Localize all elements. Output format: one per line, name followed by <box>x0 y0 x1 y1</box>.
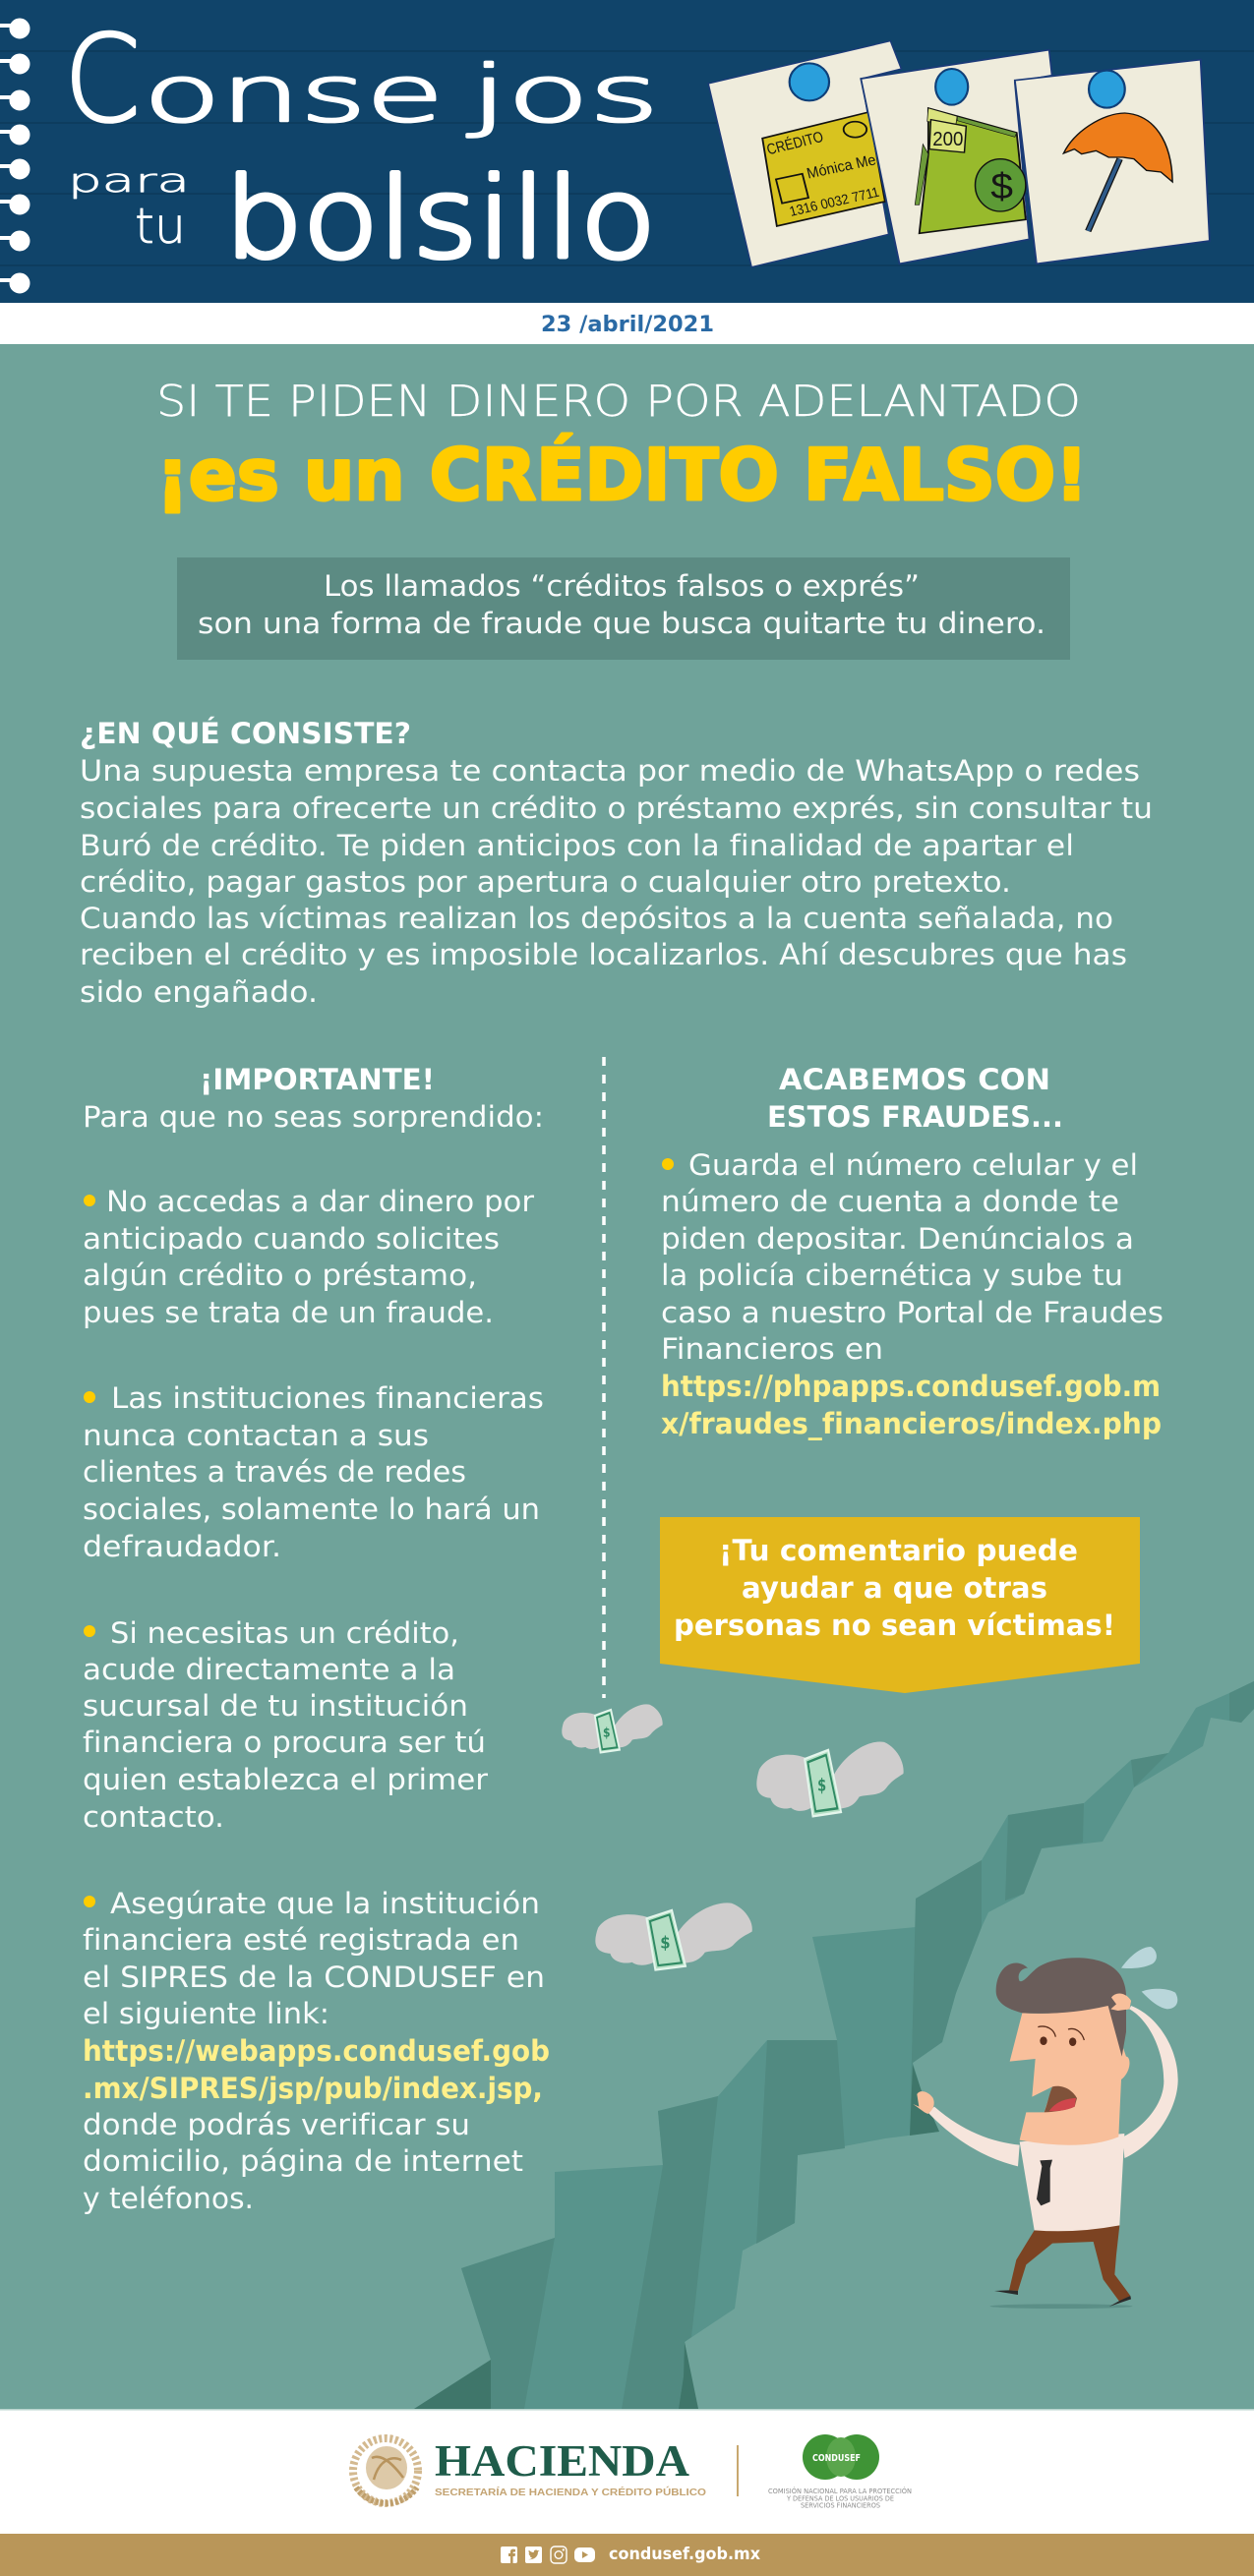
icon: youtube <box>574 2547 595 2562</box>
shoes <box>994 2290 1131 2307</box>
face and hands <box>1010 2004 1129 2145</box>
text block: en que consiste: Cuando las víctimas realizan los depósitos a la cuenta señalada, no <box>80 902 1113 935</box>
heading: es un credito falso: ¡es un CRÉDITO FALSO! <box>156 434 1088 516</box>
note: umbrella <box>1015 60 1210 263</box>
flying money illustrations <box>562 1704 904 1970</box>
bullet 3: sucursal de tu institución <box>83 1689 468 1723</box>
date band: 23 /abril/2021 <box>541 313 714 337</box>
shirt <box>927 2006 1178 2231</box>
bullet 4: el SIPRES de la CONDUSEF en <box>83 1961 545 1994</box>
bullet 4: y teléfonos. <box>83 2182 254 2215</box>
bullet text: número de cuenta a donde te <box>661 1185 1119 1218</box>
bullet 1: No accedas a dar dinero por <box>106 1185 534 1218</box>
bullet 2: Las instituciones financieras <box>111 1381 544 1415</box>
footer logos band <box>0 2409 1254 2534</box>
bullet 1: anticipado cuando solicites <box>83 1222 500 1256</box>
text block: en que consiste: Buró de crédito. Te piden anticipos con la finalidad de apartar el <box>80 829 1074 862</box>
bullet 3: contacto. <box>83 1800 224 1834</box>
mouth <box>1045 2086 1077 2112</box>
bullet 4: domicilio, página de internet <box>83 2144 523 2178</box>
text block: en que consiste: crédito, pagar gastos por apertura o cualquier otro pretexto. <box>80 865 1011 899</box>
heading: importante: ¡IMPORTANTE! <box>200 1063 435 1096</box>
logo: hacienda wordmark: SECRETARÍA DE HACIENDA Y CRÉDITO PÚBLICO <box>435 2486 706 2498</box>
bullet 3: Si necesitas un crédito, <box>110 1616 459 1650</box>
bullet 2: clientes a través de redes <box>83 1455 466 1489</box>
bullet text: x/fraudes_financieros/index.php <box>661 1407 1162 1440</box>
icon: instagram <box>551 2547 567 2563</box>
footer social bar <box>0 2534 1254 2576</box>
title: tu: tu <box>135 198 186 255</box>
note: credit card: Mónica Me <box>805 151 877 182</box>
bullet 1: algún crédito o préstamo, <box>83 1259 477 1292</box>
date band <box>0 303 1254 344</box>
icon: notebook spiral holes <box>0 19 30 293</box>
callout banner: tu comentario <box>660 1517 1140 1693</box>
note: credit card <box>708 41 901 267</box>
text block: en que consiste: sociales para ofrecerte un crédito o préstamo exprés, sin consultar tu <box>80 791 1153 825</box>
bullet text: caso a nuestro Portal de Fraudes <box>661 1296 1164 1329</box>
bullet text: Financieros en <box>661 1332 883 1366</box>
text block: en que consiste: Una supuesta empresa te contacta por medio de WhatsApp o redes <box>80 754 1140 788</box>
bullet text: la policía cibernética y sube tu <box>661 1259 1123 1292</box>
heading: acabemos: ESTOS FRAUDES... <box>767 1100 1063 1134</box>
bullet 3: financiera o procura ser tú <box>83 1726 486 1759</box>
subheading: Para que no seas sorprendido: <box>83 1100 544 1134</box>
title: Consejos: C <box>64 10 141 149</box>
illustration: worried man <box>913 1947 1178 2309</box>
heading: acabemos: ACABEMOS CON <box>779 1063 1050 1096</box>
title: Consejos: onse <box>144 49 444 140</box>
text block: en que consiste <box>80 717 1153 1009</box>
icon: small winged bill: $ <box>603 1725 610 1740</box>
icon: large winged bill <box>595 1903 752 1970</box>
bullet 4: https://webapps.condusef.gob <box>83 2034 550 2068</box>
sweat drops <box>1121 1947 1177 2009</box>
heading: acabemos <box>767 1063 1063 1134</box>
bullet text: piden depositar. Denúncialos a <box>661 1222 1134 1256</box>
bullet 1: pues se trata de un fraude. <box>83 1296 494 1329</box>
pinned notes illustration <box>708 41 1210 267</box>
callout banner: tu comentario: ayudar a que otras <box>742 1571 1047 1605</box>
eyes and brows <box>1040 2036 1047 2045</box>
website: condusef.gob.mx <box>609 2545 760 2564</box>
text block: en que consiste: ¿EN QUÉ CONSISTE? <box>80 717 411 750</box>
title: bolsillo: bolsillo <box>224 155 656 283</box>
icon: small winged bill <box>562 1704 663 1752</box>
callout: creditos falsos <box>177 557 1070 660</box>
dotted column divider <box>602 1057 606 1698</box>
bullet 4: financiera esté registrada en <box>83 1923 519 1957</box>
bullet 3 <box>83 1616 488 1834</box>
title: Consejos: jos <box>467 49 659 140</box>
icon: twitter <box>525 2547 542 2563</box>
bullet 2 <box>83 1381 544 1563</box>
logo: hacienda wordmark: HACIENDA <box>435 2436 690 2486</box>
bullet 2: nunca contactan a sus <box>83 1419 429 1452</box>
bullet text <box>661 1148 1164 1440</box>
panel: importante <box>83 1063 550 2215</box>
logo: national seal <box>353 2438 418 2503</box>
header banner <box>0 0 1254 303</box>
bullet 4: donde podrás verificar su <box>83 2108 470 2141</box>
note: banknote <box>861 50 1052 263</box>
title: para: para <box>68 161 190 200</box>
icon: large winged bill: $ <box>660 1932 671 1953</box>
bullet 4: .mx/SIPRES/jsp/pub/index.jsp, <box>83 2072 543 2105</box>
tie <box>1037 2160 1052 2205</box>
text block: en que consiste: reciben el crédito y es imposible localizarlos. Ahí descubres que has <box>80 938 1127 971</box>
bullet 2: defraudador. <box>83 1530 281 1563</box>
logo: condusef: CONDUSEF <box>812 2453 861 2464</box>
bullet text: Guarda el número celular y el <box>688 1148 1138 1182</box>
logo: condusef: SERVICIOS FINANCIEROS <box>801 2501 880 2509</box>
callout: creditos falsos: Los llamados “créditos falsos o exprés” <box>324 569 920 603</box>
bullet 4: el siguiente link: <box>83 1997 329 2030</box>
icon: medium winged bill <box>756 1742 904 1816</box>
callout: creditos falsos: son una forma de fraude que busca quitarte tu dinero. <box>198 607 1045 640</box>
bullet 2: sociales, solamente lo hará un <box>83 1493 540 1526</box>
text block: en que consiste: sido engañado. <box>80 975 318 1009</box>
hair <box>996 1958 1126 2057</box>
panel: acabemos con estos fraudes <box>661 1063 1164 1440</box>
bullet 3: acude directamente a la <box>83 1653 455 1686</box>
callout banner: tu comentario: ¡Tu comentario puede <box>719 1534 1078 1567</box>
logo: condusef: Y DEFENSA DE LOS USUARIOS DE <box>786 2493 894 2503</box>
icon: medium winged bill: $ <box>817 1776 826 1795</box>
bullet 4 <box>83 1887 550 2215</box>
cliff illustration <box>414 1681 1254 2409</box>
icon: facebook <box>501 2547 517 2563</box>
note: banknote: $ <box>990 167 1013 207</box>
note: credit card: CRÉDITO <box>764 128 825 158</box>
trousers <box>1009 2225 1130 2302</box>
logo: condusef <box>768 2434 912 2509</box>
heading: si te piden dinero: SI TE PIDEN DINERO POR ADELANTADO <box>156 377 1081 427</box>
note: banknote: 200 <box>932 127 963 150</box>
note: credit card: 1316 0032 7711 <box>788 185 881 220</box>
bullet text: https://phpapps.condusef.gob.m <box>661 1370 1161 1403</box>
bullet 3: quien establezca el primer <box>83 1763 488 1796</box>
bullet 1 <box>83 1185 534 1329</box>
callout banner: tu comentario: personas no sean víctimas! <box>674 1609 1115 1642</box>
bullet 4: Asegúrate que la institución <box>110 1887 540 1920</box>
logo: condusef: COMISIÓN NACIONAL PARA LA PROTECCIÓN <box>768 2487 912 2495</box>
